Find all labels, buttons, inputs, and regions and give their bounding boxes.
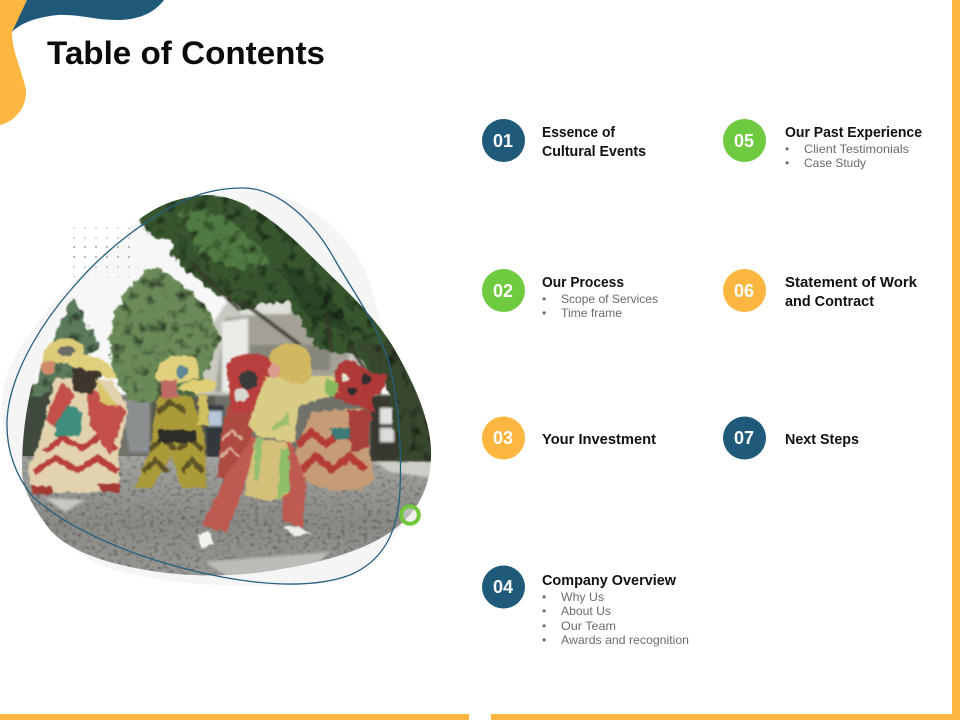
item 01: Cultural Events <box>542 144 646 160</box>
item 07: Next Steps <box>785 432 859 448</box>
background: building and midground <box>22 298 432 463</box>
item 05: Case Study <box>804 156 866 170</box>
dot pattern <box>73 227 130 278</box>
man in mask <box>198 344 339 548</box>
blue outline <box>7 188 401 584</box>
item 05: 05 <box>734 131 754 151</box>
item 05: Our Past Experience <box>785 125 922 141</box>
item 05: • <box>785 142 789 156</box>
lion 4 <box>296 361 387 490</box>
item 04: Why Us <box>561 590 604 604</box>
item 06 <box>723 269 918 312</box>
ground <box>22 456 430 576</box>
item 04: Company Overview <box>542 573 677 589</box>
item 04: Our Team <box>561 619 616 633</box>
item 03: Your Investment <box>542 432 656 448</box>
item 06: 06 <box>734 281 754 301</box>
item 05: • <box>785 156 789 170</box>
lion 1 <box>28 338 128 494</box>
item 02: • <box>542 306 546 320</box>
lion 3 <box>218 353 272 478</box>
item 01 <box>482 119 646 162</box>
item 02: Time frame <box>561 306 622 320</box>
item 04: • <box>542 633 546 647</box>
item 04: Awards and recognition <box>561 633 689 647</box>
photo: lion dance performers <box>22 195 432 576</box>
green ring <box>401 506 419 524</box>
item 06: Statement of Work <box>785 275 918 291</box>
item 02: • <box>542 292 546 306</box>
corner shape: blue <box>12 0 164 32</box>
corner shape: yellow <box>0 0 28 125</box>
branches <box>190 262 380 395</box>
item 02: Our Process <box>542 275 624 291</box>
title: Table of Contents <box>47 35 325 71</box>
item 04: 04 <box>493 577 513 597</box>
item 04: • <box>542 590 546 604</box>
item 07: 07 <box>734 428 754 448</box>
item 02 <box>482 269 658 320</box>
performers <box>28 338 387 548</box>
item 02: Scope of Services <box>561 292 658 306</box>
item 04: • <box>542 619 546 633</box>
item 05 <box>723 119 922 170</box>
item 06: and Contract <box>785 294 874 310</box>
tree foliage <box>30 192 435 462</box>
item 01: 01 <box>493 131 513 151</box>
item 04: About Us <box>561 604 611 618</box>
item 04: • <box>542 604 546 618</box>
item 04 <box>482 566 689 647</box>
item 01: Essence of <box>542 125 615 141</box>
right border bar <box>952 0 960 720</box>
grey backdrop blob <box>2 190 419 586</box>
item 07 <box>723 416 859 460</box>
bottom border bar <box>0 714 960 720</box>
item 05: Client Testimonials <box>804 142 909 156</box>
item 02: 02 <box>493 281 513 301</box>
lion 2 <box>136 355 218 488</box>
item 03: 03 <box>493 428 513 448</box>
item 03 <box>482 416 656 460</box>
